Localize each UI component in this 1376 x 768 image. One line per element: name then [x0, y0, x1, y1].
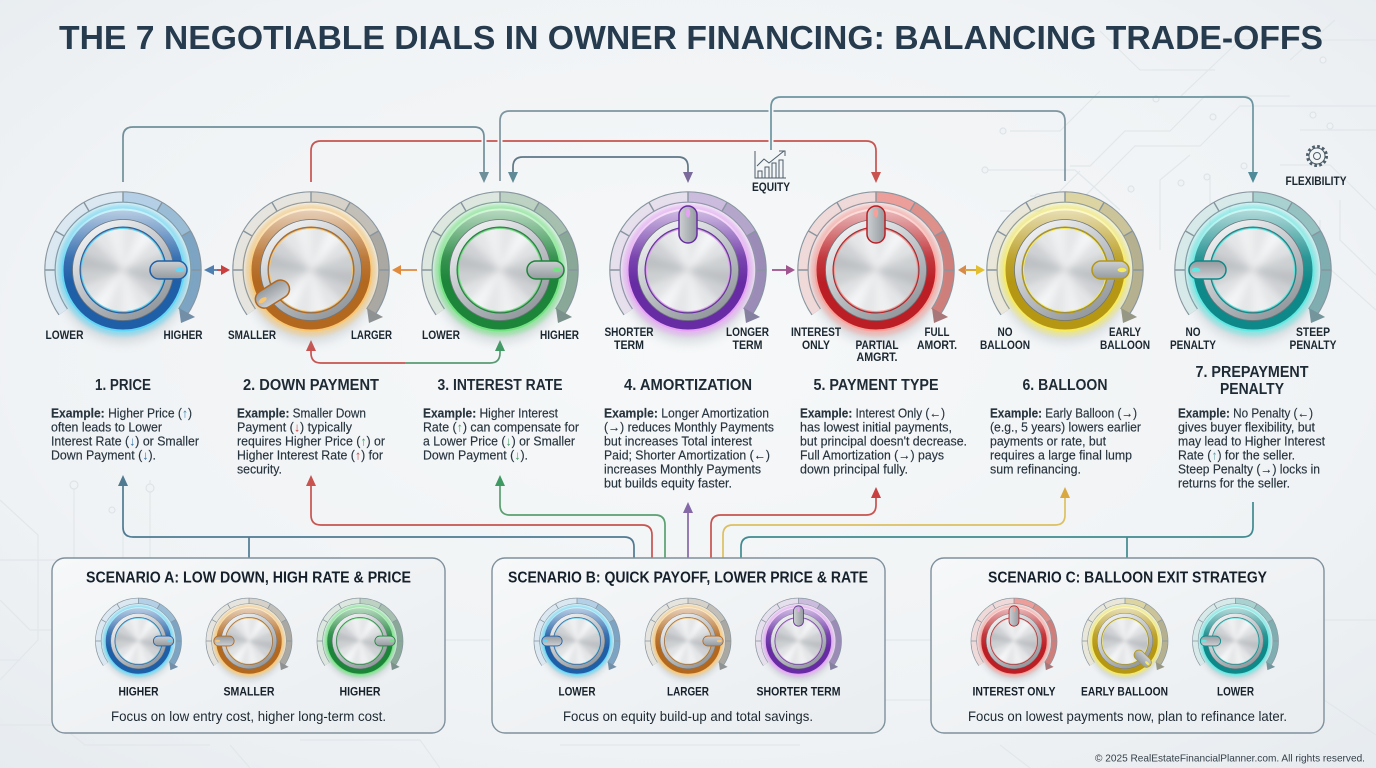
dial scale labels: STEEP	[1296, 327, 1330, 339]
text block: amortization: increases Monthly Payments	[604, 462, 761, 476]
text block: payment type	[800, 377, 967, 476]
text block: balloon: Example: Early Balloon (→)	[990, 406, 1137, 420]
text block: balloon: sum refinancing.	[990, 462, 1081, 476]
scenario C labels	[972, 684, 1254, 698]
text block: amortization: but builds equity faster.	[604, 476, 732, 490]
scenario C caption: Focus on lowest payments now, plan to refinance later.	[968, 708, 1287, 724]
panel: scenario A	[52, 558, 445, 733]
text block: amortization: but increases Total interest	[604, 434, 753, 448]
text block: amortization: 4. AMORTIZATION	[624, 377, 752, 394]
scenario B labels: SHORTER TERM	[756, 684, 841, 698]
text block: interest rate: Down Payment (↓).	[423, 448, 528, 462]
text block: payment type: but principal doesn't decrease.	[800, 434, 967, 448]
text block: balloon: requires a large final lump	[990, 448, 1132, 462]
icon: flexibility: FLEXIBILITY	[1286, 176, 1347, 188]
scenario B heading: SCENARIO B: QUICK PAYOFF, LOWER PRICE & RATE	[508, 570, 868, 586]
dial 5: payment type	[798, 192, 954, 343]
text block: interest rate: a Lower Price (↓) or Smaller	[423, 434, 575, 448]
text block: payment type: 5. PAYMENT TYPE	[814, 377, 938, 394]
scenario A labels: HIGHER	[340, 684, 381, 698]
text block: payment type: has lowest initial payments,	[800, 420, 952, 434]
text block: interest rate: Example: Higher Interest	[423, 406, 558, 420]
dial scale labels: PARTIAL	[856, 340, 898, 352]
text block: interest rate: Rate (↑) can compensate for	[423, 420, 579, 434]
text block: price: Down Payment (↓).	[51, 448, 156, 462]
dial scale labels: SMALLER	[228, 330, 277, 342]
scenario B dial: lower price	[534, 598, 620, 681]
dial scale labels: HIGHER	[164, 330, 203, 342]
text block: prepayment penalty: may lead to Higher Interest	[1178, 434, 1326, 448]
text block: down payment: Example: Smaller Down	[237, 406, 366, 420]
scenario C dial: interest only	[971, 598, 1057, 681]
dial scale labels: FULL	[924, 327, 950, 339]
scenario B dial: shorter term	[756, 598, 841, 681]
text block: payment type: down principal fully.	[800, 462, 908, 476]
text block: prepayment penalty: Example: No Penalty (←)	[1178, 406, 1313, 420]
text block: prepayment penalty: gives buyer flexibility, but	[1178, 420, 1316, 434]
text block: down payment: Payment (↓) typically	[237, 420, 353, 434]
dial scale labels: TERM	[732, 340, 762, 352]
scenario C labels: INTEREST ONLY	[972, 684, 1056, 698]
text block: price	[51, 377, 199, 462]
dial scale labels: ONLY	[802, 340, 830, 352]
dial scale labels: BALLOON	[980, 340, 1030, 352]
title: THE 7 NEGOTIABLE DIALS IN OWNER FINANCING: BALANCING TRADE-OFFS	[59, 20, 1323, 57]
dial 7: prepayment penalty	[1175, 192, 1331, 343]
scenario C heading: SCENARIO C: BALLOON EXIT STRATEGY	[988, 570, 1268, 586]
text block: balloon	[990, 377, 1141, 476]
text block: down payment: requires Higher Price (↑) or	[237, 434, 385, 448]
text block: balloon: (e.g., 5 years) lowers earlier	[990, 420, 1141, 434]
icon: equity	[752, 151, 790, 194]
scenario A labels: HIGHER	[118, 684, 159, 698]
dial scale labels: AMGRT.	[856, 352, 898, 364]
scenario A labels: SMALLER	[224, 684, 275, 698]
text block: down payment	[237, 377, 385, 476]
dial 6: balloon	[987, 192, 1143, 343]
scenario A dial: higher rate	[317, 598, 403, 681]
text block: prepayment penalty	[1178, 364, 1326, 490]
text block: down payment: security.	[237, 462, 282, 476]
dial scale labels: TERM	[614, 340, 644, 352]
dial scale labels: LARGER	[351, 330, 393, 342]
dial scale labels: PENALTY	[1170, 340, 1216, 352]
scenario A labels	[118, 684, 381, 698]
text block: price: Interest Rate (↓) or Smaller	[51, 434, 199, 448]
dial scale labels: INTEREST	[791, 327, 841, 339]
text block: prepayment penalty: Steep Penalty (→) locks in	[1178, 462, 1320, 476]
icon: equity: EQUITY	[752, 182, 790, 194]
text block: amortization: Example: Longer Amortization	[604, 406, 769, 420]
panel: scenario B	[492, 558, 885, 733]
text block: amortization: Paid; Shorter Amortization (←)	[604, 448, 770, 462]
scenario C dial: early balloon	[1082, 598, 1168, 681]
text block: down payment: Higher Interest Rate (↑) for	[237, 448, 383, 462]
dial scale labels: NO	[998, 327, 1013, 339]
text block: prepayment penalty: returns for the seller.	[1178, 476, 1290, 490]
scenario A heading: SCENARIO A: LOW DOWN, HIGH RATE & PRICE	[86, 570, 411, 586]
text block: prepayment penalty: 7. PREPAYMENT	[1196, 364, 1309, 381]
text block: prepayment penalty: PENALTY	[1220, 381, 1285, 398]
text block: price: Example: Higher Price (↑)	[51, 406, 192, 420]
scenario B labels: LARGER	[667, 684, 709, 698]
text block: down payment: 2. DOWN PAYMENT	[243, 377, 379, 394]
scenario C labels: EARLY BALLOON	[1081, 684, 1168, 698]
dial 1: price	[45, 192, 201, 343]
text block: price: often leads to Lower	[51, 420, 162, 434]
dial scale labels: EARLY	[1109, 327, 1141, 339]
icon: flexibility	[1286, 147, 1347, 188]
text block: price: 1. PRICE	[95, 377, 151, 394]
text block: payment type: Full Amortization (→) pays	[800, 448, 944, 462]
dial scale labels: PENALTY	[1290, 340, 1337, 352]
text block: interest rate	[423, 377, 579, 462]
text block: interest rate: 3. INTEREST RATE	[438, 377, 562, 394]
scenario B labels	[558, 684, 841, 698]
connectors: dial to dial	[123, 97, 1258, 363]
dial 2: down payment	[233, 192, 389, 343]
dial scale labels: SHORTER	[604, 327, 654, 339]
dial scale labels: HIGHER	[540, 330, 580, 342]
text block: amortization	[604, 377, 774, 490]
text block: amortization: (→) reduces Monthly Payments	[604, 420, 774, 434]
dial scale labels: LOWER	[46, 330, 84, 342]
copyright: © 2025 RealEstateFinancialPlanner.com. All rights reserved.	[1095, 752, 1365, 764]
dial scale labels: BALLOON	[1100, 340, 1150, 352]
scenario A dial: smaller down payment	[206, 598, 292, 681]
side arrows between dials	[204, 265, 985, 275]
text block: balloon: 6. BALLOON	[1022, 377, 1108, 394]
text block: balloon: payments or rate, but	[990, 434, 1107, 448]
scenario C dial: lower penalty	[1193, 598, 1278, 681]
dial scale labels: LOWER	[422, 330, 461, 342]
scenario B caption: Focus on equity build-up and total savings.	[563, 708, 813, 724]
dial 4: amortization	[610, 192, 766, 343]
scenario A dial: higher price	[96, 598, 181, 681]
dial scale labels: NO	[1186, 327, 1201, 339]
text block: prepayment penalty: Rate (↑) for the seller.	[1178, 448, 1295, 462]
text block: payment type: Example: Interest Only (←)	[800, 406, 945, 420]
dial scale labels: LONGER	[726, 327, 770, 339]
scenario B dial: larger down payment	[645, 598, 731, 681]
dial 3: interest rate	[422, 192, 578, 343]
scenario B labels: LOWER	[558, 684, 596, 698]
scenario A caption: Focus on low entry cost, higher long-term cost.	[111, 708, 386, 724]
dial scale labels: AMORT.	[917, 340, 957, 352]
dial scale labels	[46, 327, 1337, 364]
connectors: scenarios to dials	[118, 475, 1253, 558]
panel: scenario C	[931, 558, 1324, 733]
scenario C labels: LOWER	[1217, 684, 1254, 698]
